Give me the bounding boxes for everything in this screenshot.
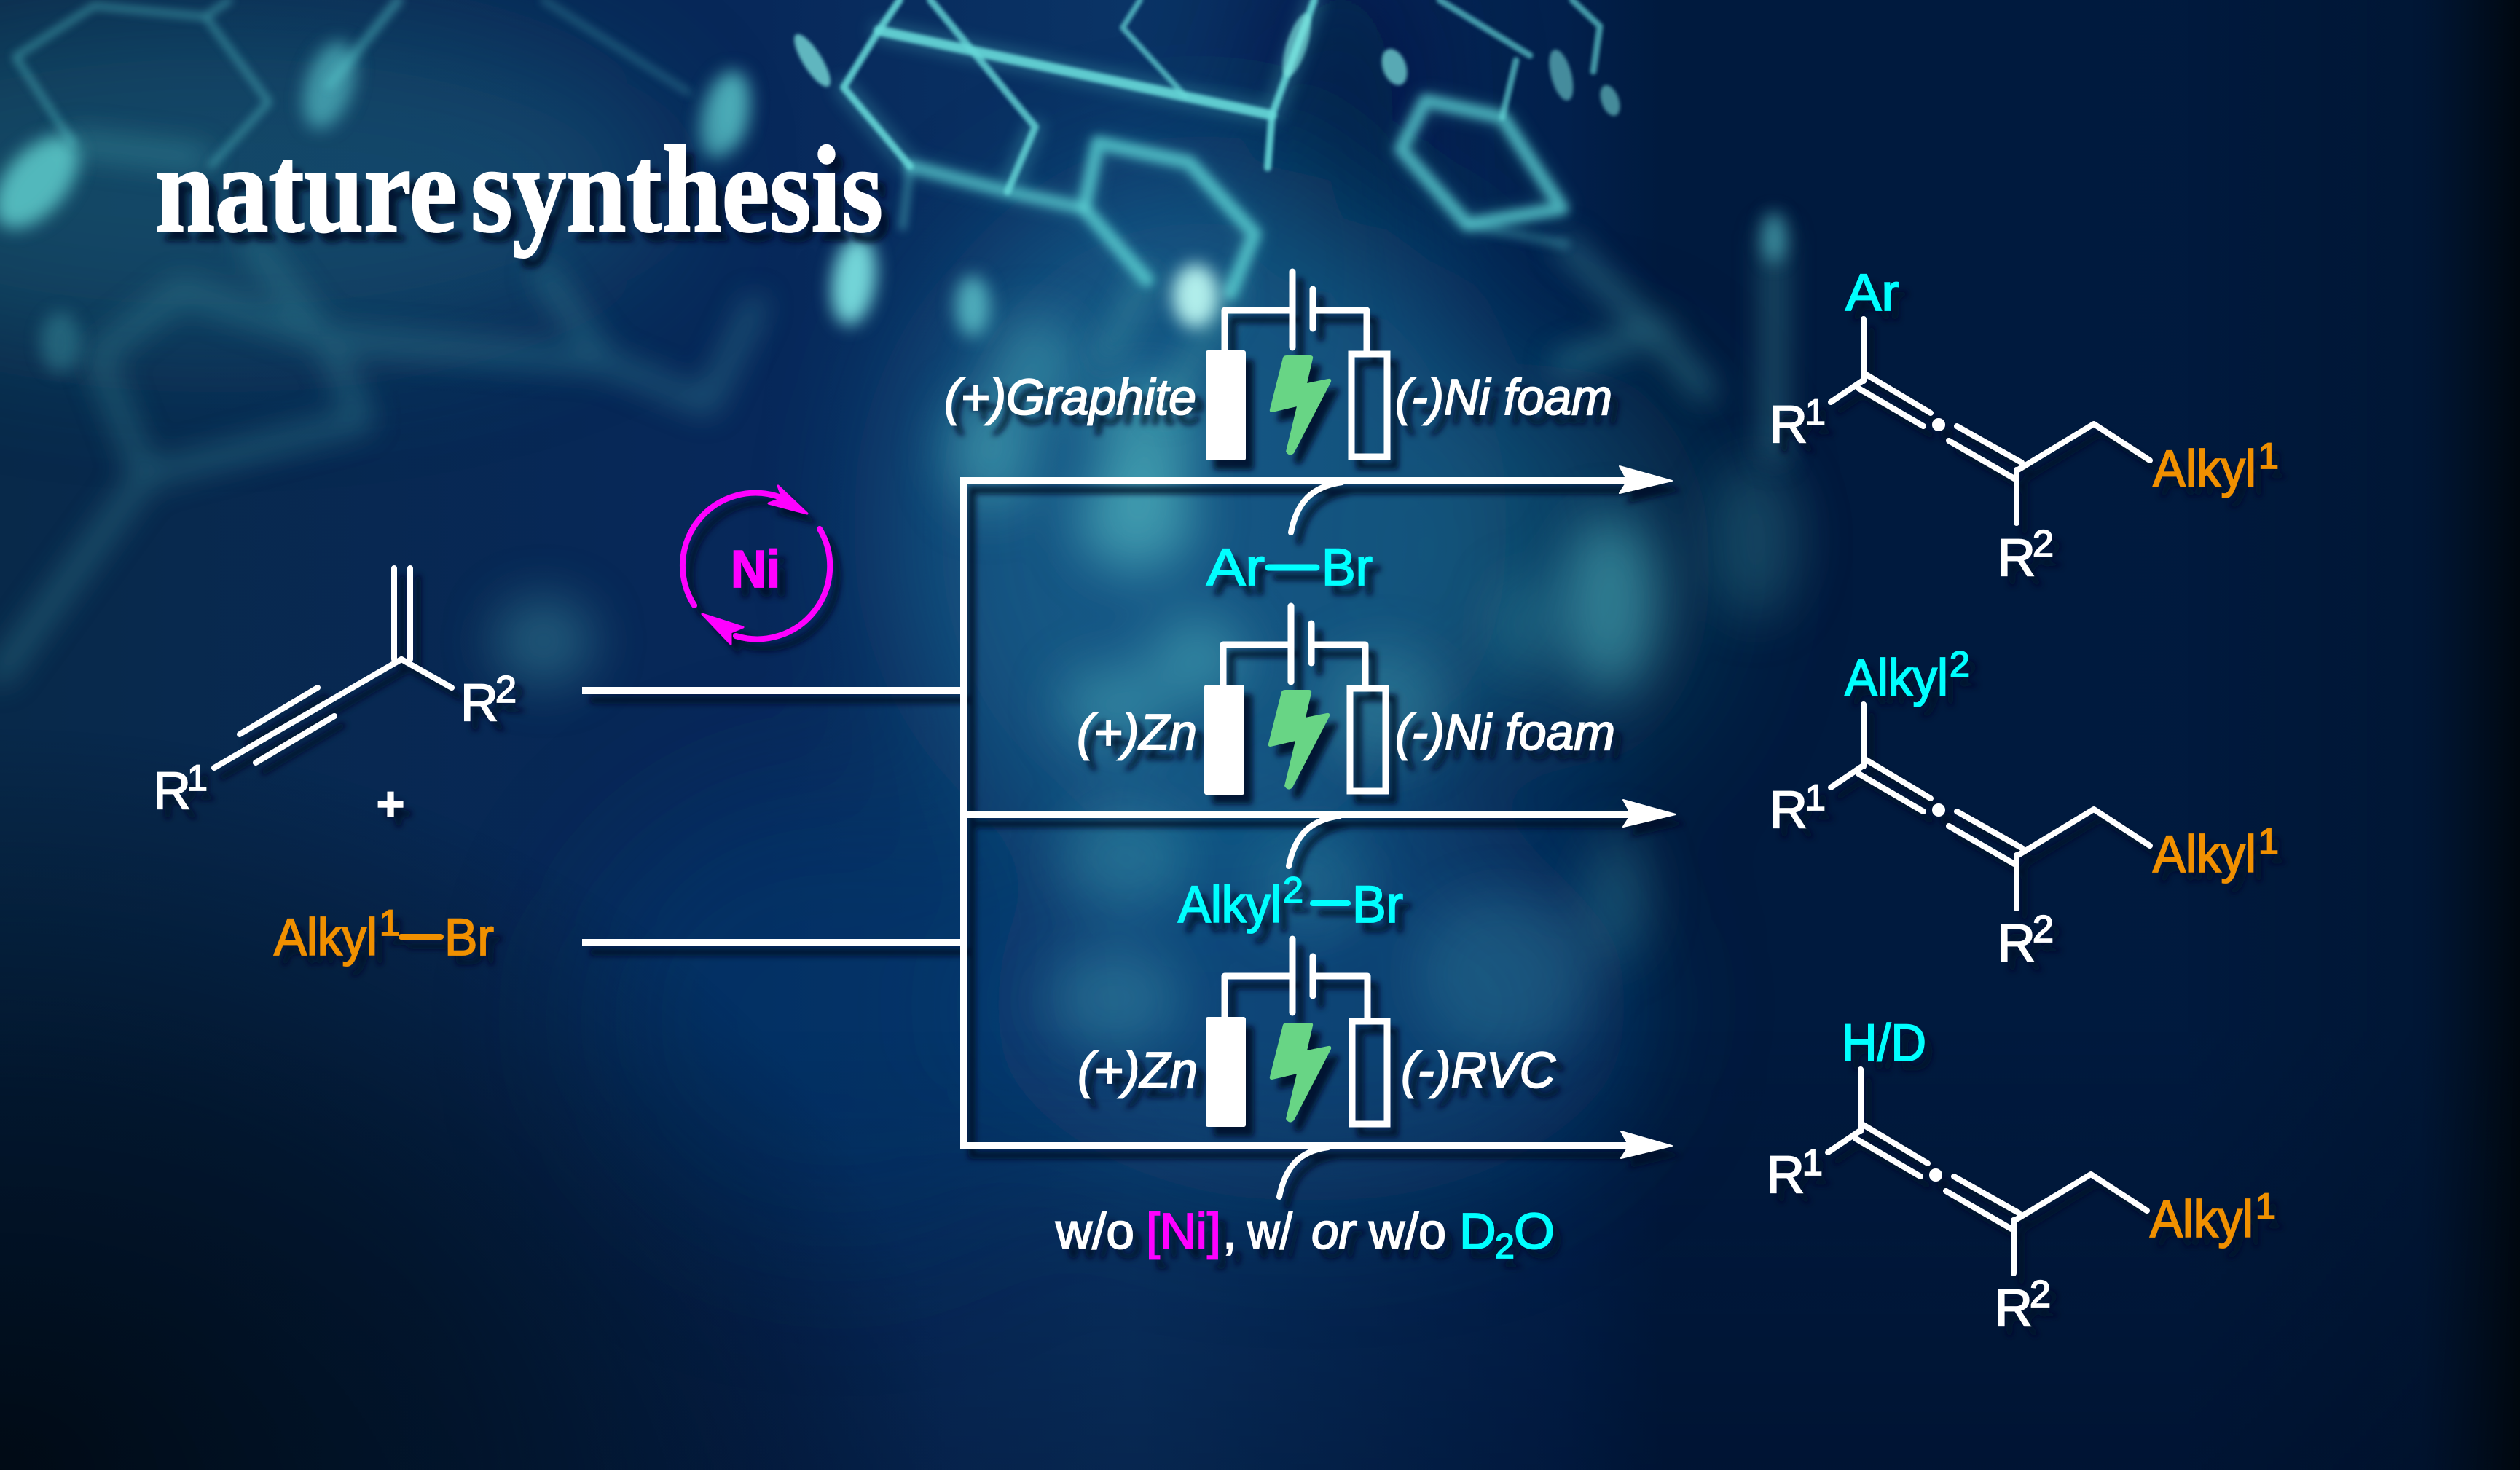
reagent: Alkyl1-Br: Br	[444, 909, 494, 967]
conditions: without nickel, with or without D2O: O	[1514, 1203, 1555, 1259]
faint thick lines	[0, 144, 1774, 674]
glow around upper molecule	[844, 0, 1562, 293]
icon: nickel catalytic cycle: Ni	[731, 541, 780, 599]
product 3: hydro or deutero allene: H/D	[1842, 1015, 1926, 1072]
starting material: enyne: R	[153, 762, 191, 820]
icon: nickel catalytic cycle	[683, 486, 830, 644]
product 2: alkyl allene: R	[1998, 914, 2036, 972]
conditions: without nickel, with or without D2O: 2	[1495, 1227, 1515, 1266]
conditions: without nickel, with or without D2O	[1055, 1203, 1555, 1266]
plus sign: +	[377, 777, 404, 830]
product 3: hydro or deutero allene: Alkyl	[2150, 1191, 2253, 1249]
product 1: aryl allene: 1	[2258, 436, 2279, 476]
reagent: Alkyl2-Br	[1178, 870, 1403, 934]
sharp upper lines	[844, 0, 1600, 192]
product 3: hydro or deutero allene: 1	[2256, 1186, 2276, 1227]
product 2: alkyl allene: 1	[2258, 821, 2279, 862]
reagent: Alkyl2-Br: Br	[1352, 876, 1403, 934]
product 2: alkyl allene: 1	[1805, 777, 1826, 818]
wide haze	[0, 0, 1712, 1253]
branching reaction arrows	[960, 466, 1676, 1197]
product 1: aryl allene	[1770, 264, 2279, 587]
electrochemical cell 2	[1077, 606, 1615, 795]
reagent feed lines	[582, 691, 964, 943]
product 2: alkyl allene: Alkyl	[1845, 650, 1948, 707]
reagent: Alkyl2-Br: Alkyl	[1178, 876, 1281, 934]
product 1: aryl allene: R	[1770, 396, 1807, 454]
reagent: Alkyl1-Br: 1	[380, 903, 400, 943]
conditions: without nickel, with or without D2O: [Ni]	[1146, 1203, 1221, 1259]
conditions: without nickel, with or without D2O: w/	[1247, 1203, 1292, 1259]
conditions: without nickel, with or without D2O: w/o	[1055, 1203, 1134, 1259]
conditions: without nickel, with or without D2O: or	[1311, 1203, 1357, 1259]
electrochemical cell 1: (-)Ni foam	[1395, 369, 1612, 425]
title: nature synthesis	[155, 121, 883, 258]
product 3: hydro or deutero allene: R	[1995, 1279, 2033, 1337]
starting material: enyne: 1	[187, 758, 208, 798]
product 3: hydro or deutero allene	[1767, 1015, 2276, 1337]
product 2: alkyl allene: 2	[1950, 644, 1970, 685]
electrochemical cell 2: (-)Ni foam	[1395, 704, 1615, 760]
reagent: Ar-Br: Ar	[1206, 539, 1265, 597]
title: nature synthesis: nature	[155, 121, 457, 258]
product 1: aryl allene: 2	[2033, 523, 2054, 565]
title: nature synthesis: synthesis	[471, 121, 883, 258]
starting material: enyne	[153, 568, 517, 820]
conditions: without nickel, with or without D2O: D	[1459, 1203, 1496, 1259]
conditions: without nickel, with or without D2O: w/o	[1368, 1203, 1446, 1259]
electrochemical cell 1: (+)Graphite	[944, 369, 1196, 425]
electrochemical cell 1	[944, 272, 1612, 460]
product 1: aryl allene: R	[1998, 529, 2036, 587]
electrochemical cell 2: (+)Zn	[1077, 704, 1197, 760]
blobs	[0, 35, 1786, 337]
reagent: Ar-Br	[1206, 539, 1373, 597]
product 1: aryl allene: 1	[1805, 392, 1826, 433]
product 3: hydro or deutero allene: 1	[1802, 1142, 1823, 1183]
product 1: aryl allene: Alkyl	[2153, 441, 2256, 498]
reagent: Alkyl1-Br: Alkyl	[274, 909, 377, 967]
reagent: Alkyl1-Br	[274, 903, 494, 967]
starting material: enyne: 2	[495, 669, 517, 711]
electrochemical cell 3: (-)RVC	[1401, 1042, 1555, 1098]
product 3: hydro or deutero allene: 2	[2030, 1273, 2051, 1316]
electrochemical cell 3: (+)Zn	[1078, 1042, 1198, 1098]
reagent: Ar-Br: Br	[1322, 539, 1373, 597]
product 2: alkyl allene: 2	[2033, 908, 2054, 951]
mid-blur molecular rings	[903, 101, 1565, 293]
product 1: aryl allene: Ar	[1845, 264, 1899, 322]
product 2: alkyl allene: R	[1770, 781, 1807, 839]
reagent: Alkyl2-Br: 2	[1283, 870, 1303, 911]
blurred letters in the background structure	[788, 10, 1624, 119]
product 3: hydro or deutero allene: R	[1767, 1146, 1805, 1204]
product 2: alkyl allene	[1770, 644, 2279, 972]
electrochemical cell 3	[1078, 939, 1555, 1127]
conditions: without nickel, with or without D2O: ,	[1222, 1203, 1236, 1259]
product 2: alkyl allene: Alkyl	[2153, 826, 2256, 884]
starting material: enyne: R	[460, 674, 498, 732]
